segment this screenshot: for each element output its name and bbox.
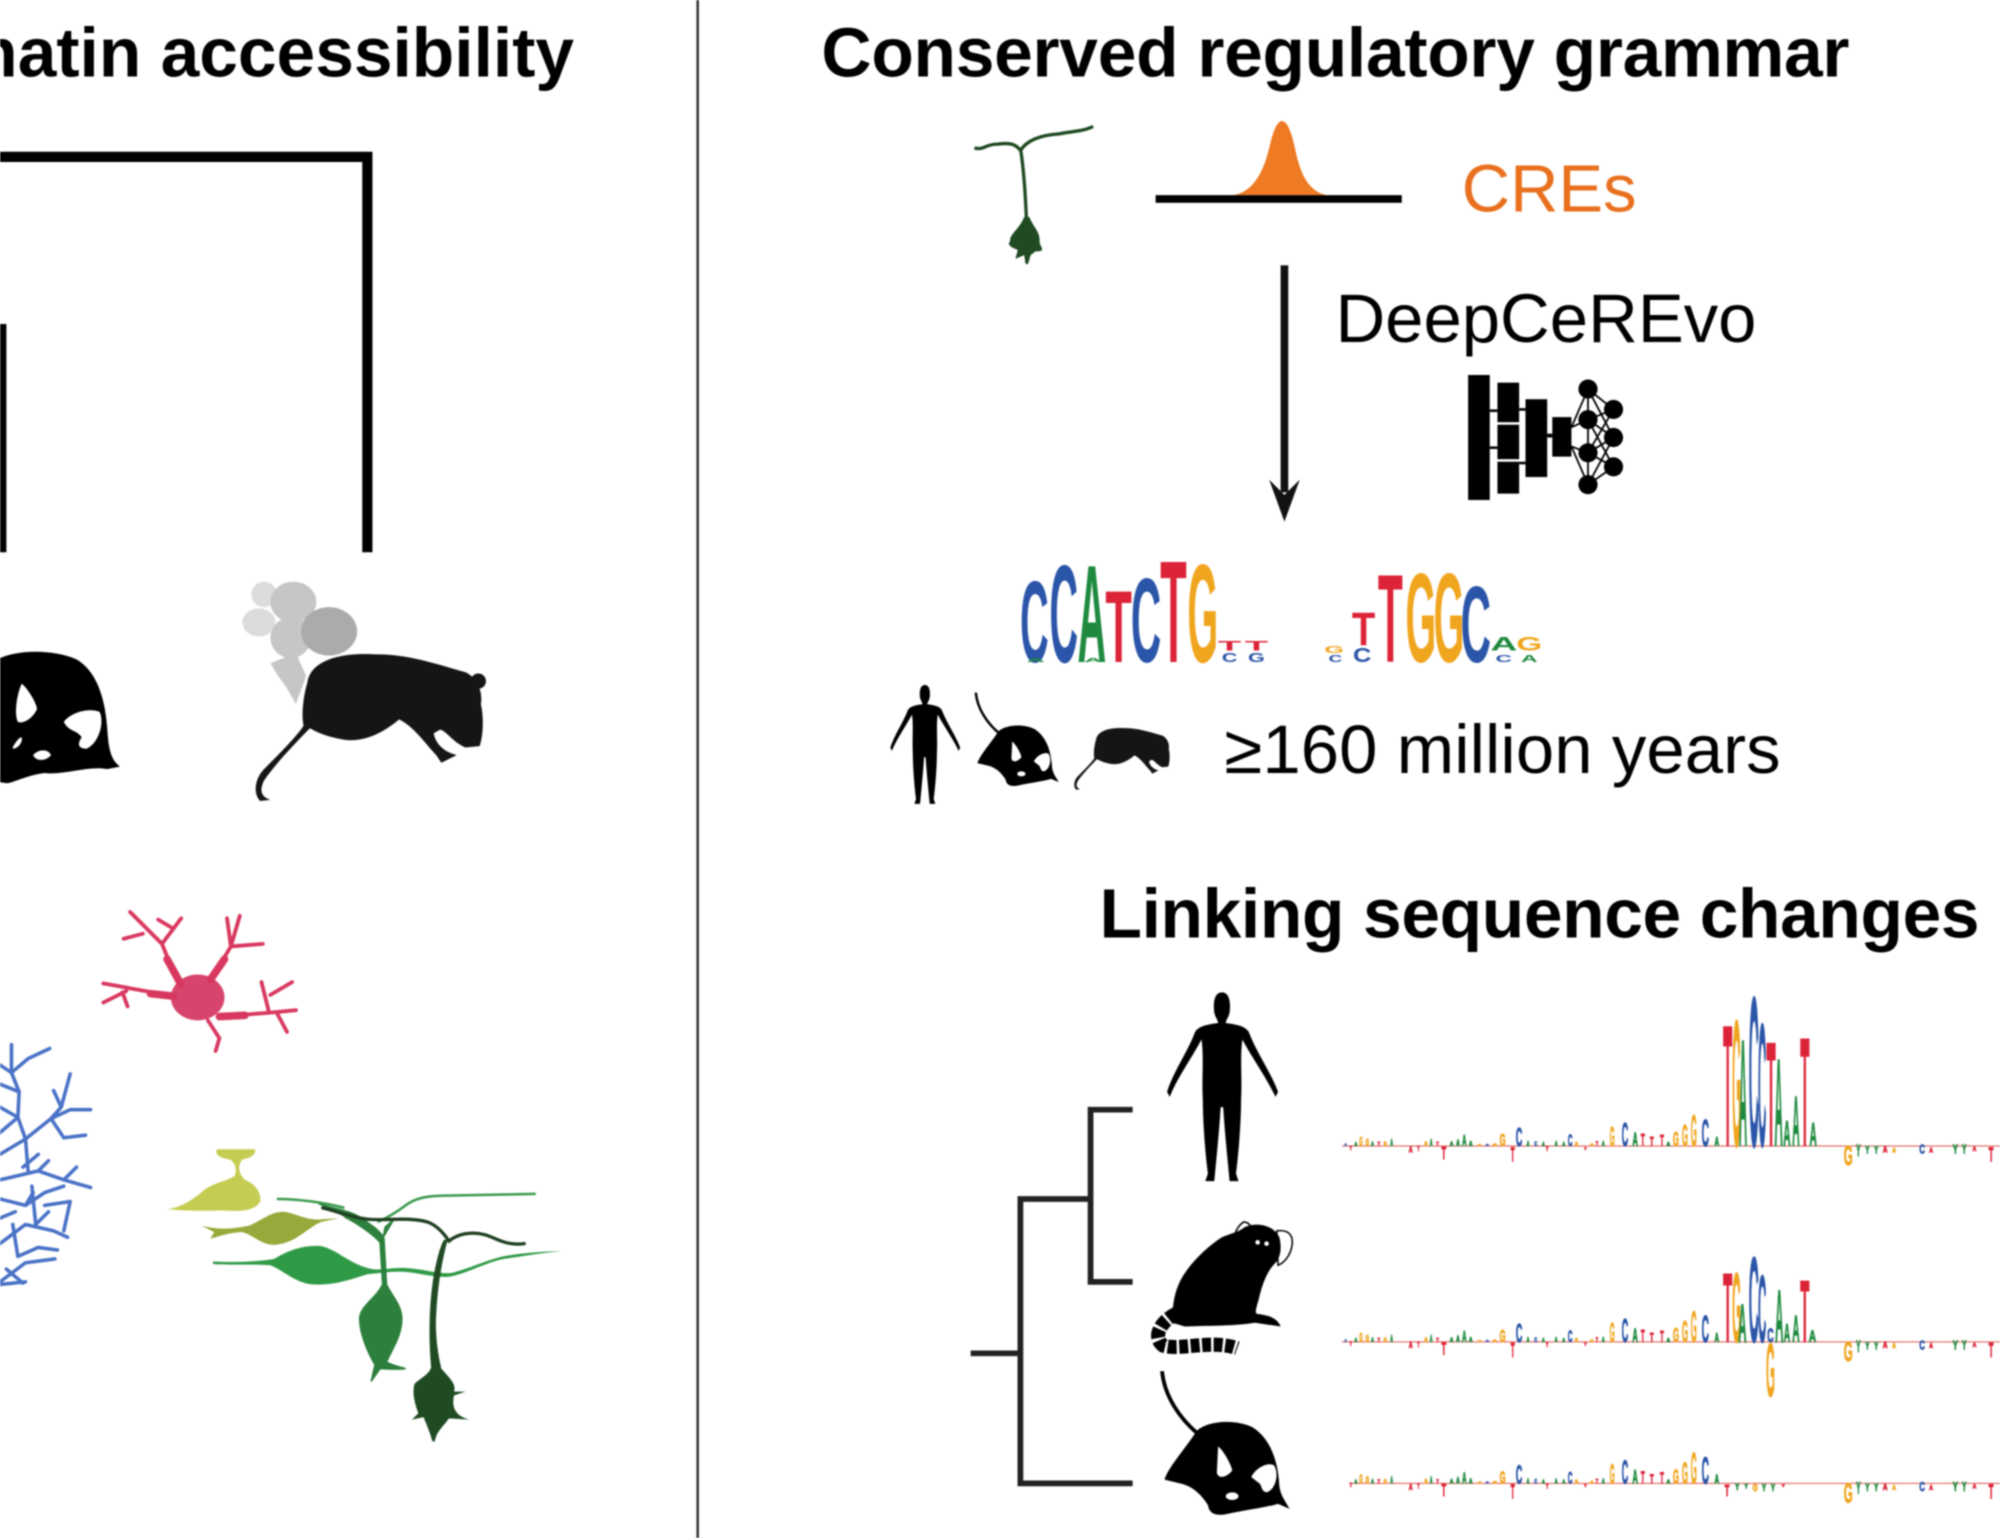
sequence logo track: human: T (1442, 1143, 1447, 1163)
sequence logo track: mouse: C (1516, 1462, 1522, 1490)
sequence logo: CCATCTG motif: T (1218, 638, 1242, 654)
sequence logo track: mouse: Y (1744, 1484, 1748, 1491)
sequence logo track: lemur: T (1436, 1337, 1439, 1343)
sequence logo track: human: Y (1962, 1144, 1967, 1157)
sequence logo track: human: T (1660, 1133, 1664, 1150)
icon: neural network (1468, 375, 1623, 500)
sequence logo track: mouse: A (1527, 1478, 1530, 1486)
sequence logo track: mouse: T (1350, 1483, 1352, 1488)
sequence logo track: human: A (1809, 1118, 1817, 1154)
sequence logo track: human: A (1409, 1144, 1413, 1155)
sequence logo track: lemur: T (1989, 1340, 1994, 1362)
sequence logo track: mouse: A (1450, 1479, 1454, 1486)
sequence logo track: lemur: C (1702, 1308, 1709, 1350)
sequence logo track: lemur: G (1673, 1325, 1679, 1347)
sequence logo track: lemur: A (1354, 1337, 1358, 1343)
sequence logo track: mouse: A (1542, 1479, 1545, 1485)
sequence logo track: human: Y (1953, 1143, 1958, 1157)
sequence logo track: lemur: A (1738, 1293, 1746, 1354)
sequence logo track: mouse: T (1584, 1484, 1587, 1488)
sequence logo track: mouse: A (1354, 1479, 1358, 1485)
sequence logo track: lemur: C (1919, 1339, 1925, 1353)
sequence logo: TGGC motif: G (1516, 633, 1542, 655)
sequence logo track: mouse: A (1929, 1484, 1933, 1492)
sequence logo track: human: Y (1874, 1144, 1879, 1156)
sequence logo track: human: A (1469, 1140, 1473, 1148)
heading: conserved regulatory grammar: Conserved regulatory grammar (821, 14, 1849, 92)
icon: opossum with embryo (242, 582, 486, 801)
sequence logo track: lemur: C (1568, 1327, 1572, 1346)
sequence logo track: mouse: T (1546, 1484, 1549, 1491)
sequence logo track: lemur: T (1350, 1341, 1352, 1347)
sequence logo track: lemur: G (1493, 1338, 1497, 1343)
sequence logo: CCATCTG motif: G (1248, 651, 1265, 665)
sequence logo track: human: T (1511, 1144, 1515, 1167)
sequence logo track: mouse: G (1844, 1478, 1853, 1509)
sequence logo track: mouse: C (1622, 1455, 1628, 1492)
sequence logo track: human: T (1350, 1145, 1352, 1151)
icon: mouse (0, 652, 120, 783)
sequence logo: TGGC motif: T (1378, 549, 1403, 689)
icon: human silhouette (1167, 992, 1278, 1181)
sequence logo track: mouse: A (1371, 1479, 1374, 1486)
sequence logo track: lemur: Y (1856, 1338, 1861, 1356)
sequence logo: CCATCTG motif: C (1222, 651, 1238, 665)
sequence logo track: lemur: G (1366, 1333, 1369, 1344)
sequence logo: CCATCTG motif: T (1245, 638, 1269, 654)
sequence logo track: lemur: G (1478, 1339, 1482, 1343)
sequence logo track: human: A (1542, 1142, 1545, 1147)
sequence logo track: mouse: C (1568, 1469, 1572, 1487)
sequence logo track: human: T (1800, 1007, 1810, 1180)
sequence logo track: mouse: A (1390, 1474, 1393, 1486)
sequence logo track: human: A (1354, 1142, 1358, 1147)
sequence logo track: lemur: T (1660, 1329, 1664, 1346)
panel divider (697, 0, 699, 1538)
sequence logo track: human: T (1378, 1142, 1380, 1147)
sequence logo track: mouse: C (1534, 1479, 1537, 1486)
sequence logo track: lemur: A (1792, 1308, 1800, 1350)
sequence logo track: mouse: C (1702, 1449, 1709, 1492)
sequence logo: TGGC motif: C (1461, 566, 1491, 686)
icon: mouse silhouette (1162, 1371, 1290, 1515)
sequence logo track: lemur: G (1766, 1327, 1775, 1413)
sequence logo track: human: A (1555, 1141, 1558, 1149)
sequence logo track: lemur: T (1378, 1337, 1380, 1343)
sequence logo track: lemur: G (1384, 1337, 1387, 1344)
sequence logo track: lemur: G (1575, 1337, 1578, 1343)
sequence logo track: human: G (1478, 1144, 1482, 1147)
sequence logo track: lemur: G (1610, 1318, 1615, 1349)
icon: yellow-green cell (167, 1149, 260, 1211)
sequence logo track: lemur: T (1650, 1332, 1654, 1346)
sequence logo track: human: C (1749, 954, 1759, 1193)
sequence logo track: mouse: G (1682, 1456, 1688, 1490)
sequence logo track: human: T (1584, 1147, 1587, 1151)
sequence logo track: lemur: T (1800, 1264, 1810, 1361)
sequence logo track: lemur: A (1390, 1333, 1393, 1344)
sequence logo track: human: G (1500, 1130, 1506, 1150)
sequence logo track: mouse: A (1469, 1478, 1473, 1486)
sequence logo track: lemur: C (1534, 1337, 1537, 1344)
sequence logo track: lemur: A (1450, 1337, 1454, 1344)
sequence logo track: lemur: G (1682, 1314, 1688, 1349)
sequence logo track: lemur: A (1973, 1343, 1977, 1349)
sequence logo track: mouse: T (1650, 1473, 1654, 1487)
sequence logo: TGGC motif: C (1329, 653, 1342, 665)
embryo stages (242, 582, 357, 704)
sequence logo: TGGC motif: G (1406, 549, 1436, 690)
sequence logo track: human: G (1610, 1123, 1615, 1153)
sequence logo track: lemur: C (1486, 1339, 1489, 1343)
sequence logo track: human: A (1632, 1130, 1638, 1151)
sequence logo track: mouse: A (1715, 1473, 1720, 1487)
label: CREs: CREs (1462, 152, 1637, 227)
sequence logo track: human: A (1527, 1141, 1530, 1149)
sequence logo track: mouse: A (1973, 1484, 1977, 1491)
sequence logo track: human: C (1568, 1132, 1572, 1150)
sequence logo track: lemur: C (1345, 1338, 1347, 1343)
sequence logo track: human: C (1758, 988, 1766, 1184)
sequence logo track: mouse: Y (1953, 1480, 1958, 1495)
sequence logo track: human: C (1702, 1112, 1709, 1154)
phylogeny bracket (0, 157, 367, 552)
phylogenetic tree (971, 1110, 1133, 1483)
sequence logo track: human: C (1345, 1143, 1347, 1147)
sequence logo track: mouse: T (1989, 1482, 1994, 1504)
sequence logo track: lemur: C (1767, 1325, 1774, 1347)
sequence logo track: human: C (1919, 1143, 1925, 1157)
label: conservation time: ≥160 million years (1224, 711, 1781, 788)
sequence logo track: human: A (1883, 1144, 1888, 1155)
sequence logo track: mouse: G (1610, 1460, 1615, 1490)
sequence logo track: mouse: Y (1735, 1482, 1740, 1492)
sequence logo track: lemur: A (1456, 1333, 1460, 1344)
sequence logo track: lemur: Y (1874, 1340, 1879, 1352)
sequence logo track: human: A (1783, 1113, 1791, 1154)
sequence logo track: mouse: A (1892, 1484, 1896, 1492)
sequence logo: TGGC motif: G (1324, 644, 1344, 656)
sequence logo track: human: G (1359, 1135, 1363, 1150)
sequence logo track: human: G (1691, 1106, 1697, 1156)
sequence logo track: lemur: A (1929, 1342, 1933, 1351)
sequence logo track: human: A (1892, 1147, 1896, 1155)
sequence logo track: lemur: A (1562, 1337, 1566, 1343)
sequence logo track: mouse: A (1562, 1479, 1566, 1485)
sequence logo track: human: G (1384, 1141, 1387, 1148)
sequence logo track: lemur (1342, 1234, 2000, 1413)
sequence logo track: mouse: T (1378, 1479, 1380, 1485)
sequence logo track: lemur: G (1359, 1331, 1363, 1346)
sequence logo track: lemur: A (1371, 1337, 1374, 1344)
sequence logo track: lemur: T (1546, 1342, 1549, 1349)
sequence logo track: human: A (1775, 1033, 1783, 1173)
chart: accessibility peak (1156, 121, 1402, 203)
sequence logo track: mouse: G (1673, 1466, 1679, 1489)
sequence logo track: lemur: C (1749, 1234, 1759, 1369)
sequence logo track: lemur: C (1622, 1313, 1628, 1350)
sequence logo: TGGC motif: A (1521, 653, 1538, 664)
sequence logo track: lemur: A (1462, 1329, 1467, 1346)
icon: blue dendritic cell (0, 1045, 91, 1284)
sequence logo track: lemur: A (1775, 1275, 1783, 1359)
sequence logo track: human: A (1602, 1141, 1605, 1149)
sequence logo track: mouse: Y (1771, 1481, 1775, 1493)
sequence logo track: mouse: T (1436, 1479, 1439, 1485)
sequence logo track: human: T (1596, 1141, 1599, 1148)
icon: medium green neuron (319, 1204, 406, 1381)
sequence logo track: human: C (1486, 1144, 1489, 1147)
label: DeepCeREvo: DeepCeREvo (1335, 280, 1756, 357)
sequence logo: TGGC motif (1324, 549, 1542, 690)
sequence logo track: mouse: G (1366, 1474, 1369, 1486)
sequence logo track: lemur: A (1667, 1338, 1671, 1344)
sequence logo track: lemur: T (1596, 1337, 1599, 1344)
sequence logo track: mouse: T (1725, 1482, 1730, 1500)
heading: linking sequence changes: Linking sequence changes (1099, 874, 1980, 952)
sequence logo track: mouse: G (1575, 1479, 1578, 1485)
sequence logo track: human: A (1715, 1136, 1720, 1150)
sequence logo track: lemur: A (1409, 1340, 1413, 1351)
sequence logo track: human (1342, 954, 2000, 1193)
sequence logo track: human: Y (1865, 1144, 1870, 1156)
sequence logo: TGGC motif: G (1434, 549, 1464, 690)
sequence logo track: human: C (1622, 1117, 1628, 1154)
sequence logo track: mouse: A (1456, 1475, 1460, 1486)
sequence logo track: human: A (1667, 1142, 1671, 1148)
sequence logo track: mouse: T (1660, 1470, 1664, 1487)
sequence logo track: human: G (1590, 1143, 1593, 1147)
sequence logo track: mouse: G (1478, 1481, 1482, 1484)
sequence logo track: mouse: A (1632, 1468, 1638, 1489)
icon: small opossum silhouette (1074, 728, 1170, 790)
sequence logo track: mouse: A (1602, 1478, 1605, 1486)
sequence logo track: human: A (1792, 1082, 1800, 1161)
icon: small mouse silhouette (976, 693, 1059, 786)
sequence logo track: mouse: A (1409, 1481, 1413, 1492)
sequence logo track: lemur: Y (1953, 1339, 1958, 1353)
sequence logo track: mouse: A (1883, 1482, 1888, 1492)
sequence logo: CCATCTG motif: T (1105, 570, 1132, 684)
icon: olive cell (202, 1212, 339, 1245)
sequence logo track: mouse: G (1500, 1468, 1506, 1487)
sequence logo track: mouse: Y (1865, 1481, 1870, 1494)
sequence logo: CCATCTG motif: A (1084, 657, 1102, 663)
sequence logo track: human: A (1390, 1137, 1393, 1149)
sequence logo track: mouse: G (1384, 1479, 1387, 1486)
sequence logo track: human: A (1973, 1147, 1977, 1153)
sequence logo: CCATCTG motif: C (1020, 559, 1049, 687)
sequence logo track: lemur: G (1732, 1253, 1741, 1364)
sequence logo track: human: G (1673, 1129, 1679, 1151)
sequence logo track: human: T (1989, 1144, 1994, 1167)
sequence logo track: lemur: T (1417, 1342, 1420, 1349)
sequence logo track: human: T (1650, 1136, 1654, 1150)
sequence logo track: human: A (1456, 1137, 1460, 1148)
sequence logo track: lemur: A (1632, 1326, 1638, 1347)
sequence logo track: lemur: T (1723, 1252, 1732, 1363)
sequence logo track: lemur: G (1844, 1336, 1853, 1368)
sequence logo track: lemur: A (1527, 1337, 1530, 1344)
sequence logo track: lemur: A (1715, 1332, 1720, 1346)
sequence logo track: human: A (1739, 1008, 1747, 1178)
sequence logo track: human: A (1562, 1142, 1566, 1147)
icon: small human silhouette (890, 685, 960, 804)
sequence logo track: human: C (1534, 1141, 1537, 1148)
sequence logo track: mouse: G (1425, 1479, 1428, 1486)
sequence logo track: mouse: G (1753, 1481, 1758, 1493)
sequence logo: TGGC motif: T (1352, 604, 1375, 656)
sequence logo: CCATCTG motif: T (1160, 531, 1187, 693)
sequence logo track: human: A (1929, 1147, 1933, 1155)
panel: linking sequence changes (971, 874, 2000, 1515)
sequence logo track: human: C (1516, 1125, 1522, 1153)
sequence logo track: human: A (1430, 1137, 1433, 1149)
sequence logo track: human: G (1844, 1140, 1853, 1172)
sequence logo track: mouse: A (1430, 1474, 1433, 1486)
sequence logo track: human: G (1493, 1143, 1497, 1147)
sequence logo: CCATCTG motif: C (1131, 555, 1161, 689)
sequence logo track: human: A (1450, 1142, 1454, 1148)
sequence logo track: human: Y (1856, 1142, 1861, 1160)
sequence logo track: mouse (1349, 1443, 2000, 1509)
sequence logo track: lemur: T (1442, 1339, 1447, 1358)
sequence logo track: mouse: Y (1962, 1481, 1967, 1495)
sequence logo track: lemur: A (1784, 1320, 1790, 1349)
sequence logo track: lemur: A (1469, 1336, 1473, 1344)
sequence logo track: lemur: A (1602, 1337, 1605, 1344)
sequence logo: CCATCTG motif: A (1078, 535, 1106, 692)
icon: lemur silhouette (1158, 1222, 1292, 1348)
sequence logo track: mouse: T (1596, 1479, 1599, 1486)
panel: chromatin accessibility (0, 14, 574, 1441)
sequence logo track: human: G (1575, 1142, 1578, 1147)
sequence logo: TGGC motif: C (1353, 643, 1372, 666)
sequence logo track: human: T (1641, 1130, 1645, 1150)
sequence logo track: lemur: A (1542, 1337, 1545, 1343)
sequence logo track: mouse: A (1462, 1470, 1467, 1487)
sequence logo track: lemur: Y (1962, 1339, 1967, 1353)
icon: red neuron (103, 912, 296, 1051)
sequence logo track: lemur: C (1516, 1320, 1522, 1349)
sequence logo track: lemur: Y (1865, 1340, 1870, 1352)
sequence logo: TGGC motif: A (1490, 634, 1517, 655)
sequence logo track: mouse: C (1919, 1480, 1925, 1495)
sequence logo track: lemur: G (1691, 1301, 1697, 1352)
sequence logo track: mouse: G (1691, 1443, 1697, 1493)
sequence logo track: human: A (1371, 1141, 1374, 1148)
icon: dark green neuron (974, 126, 1093, 264)
sequence logo track: lemur: A (1555, 1337, 1558, 1344)
sequence logo track: mouse: T (1511, 1481, 1515, 1504)
sequence logo track: human: G (1732, 984, 1741, 1186)
sequence logo track: lemur: G (1590, 1339, 1593, 1343)
sequence logo track: human: T (1723, 991, 1732, 1184)
sequence logo track: lemur: A (1430, 1333, 1433, 1344)
sequence logo track: mouse: G (1359, 1473, 1363, 1487)
sequence logo track: human: T (1417, 1146, 1420, 1154)
sequence logo track: human: G (1682, 1119, 1688, 1153)
sequence logo track: mouse: Y (1874, 1481, 1879, 1494)
sequence logo track: mouse: G (1493, 1480, 1497, 1484)
sequence logo track: lemur: G (1425, 1337, 1428, 1344)
sequence logo track: human: T (1436, 1142, 1439, 1147)
sequence logo track: human: G (1366, 1137, 1369, 1149)
sequence logo track: lemur: T (1641, 1326, 1645, 1346)
arrow: peak to motifs (1269, 265, 1300, 522)
sequence logo track: mouse: T (1417, 1483, 1420, 1491)
sequence logo track: lemur: A (1883, 1340, 1888, 1351)
sequence logo track: human: G (1425, 1141, 1428, 1148)
icon: thin green process (277, 1194, 536, 1222)
sequence logo track: lemur: T (1511, 1340, 1515, 1363)
sequence logo track: mouse: Y (1856, 1479, 1861, 1498)
sequence logo track: lemur: C (1758, 1256, 1766, 1363)
sequence logo: CCATCTG motif (1020, 531, 1269, 693)
sequence logo track: mouse: G (1590, 1480, 1593, 1484)
sequence logo track: mouse: T (1782, 1484, 1785, 1488)
sequence logo: CCATCTG motif: C (1050, 535, 1078, 692)
icon: green horizontal cell (213, 1246, 561, 1285)
sequence logo track: lemur: T (1584, 1343, 1587, 1347)
icon: dark green neuron (323, 1208, 524, 1441)
sequence logo track: mouse: C (1486, 1481, 1489, 1484)
sequence logo track: lemur: A (1809, 1327, 1816, 1345)
panel: conserved regulatory grammar (821, 14, 1849, 804)
sequence logo: TGGC motif: C (1496, 653, 1512, 664)
sequence logo track: mouse: A (1555, 1478, 1558, 1486)
sequence logo track: lemur: G (1500, 1326, 1506, 1346)
sequence logo track: mouse: Y (1762, 1481, 1766, 1493)
sequence logo track: human: A (1462, 1133, 1467, 1150)
sequence logo track: mouse: T (1442, 1481, 1447, 1500)
sequence logo: CCATCTG motif: A (1027, 657, 1045, 663)
sequence logo: CCATCTG motif: G (1187, 535, 1218, 692)
sequence logo track: lemur: A (1892, 1342, 1896, 1351)
sequence logo track: human: T (1766, 1012, 1776, 1178)
sequence logo track: mouse: A (1667, 1479, 1671, 1485)
sequence logo track: human: T (1546, 1146, 1549, 1154)
sequence logo track: mouse: T (1641, 1467, 1645, 1487)
